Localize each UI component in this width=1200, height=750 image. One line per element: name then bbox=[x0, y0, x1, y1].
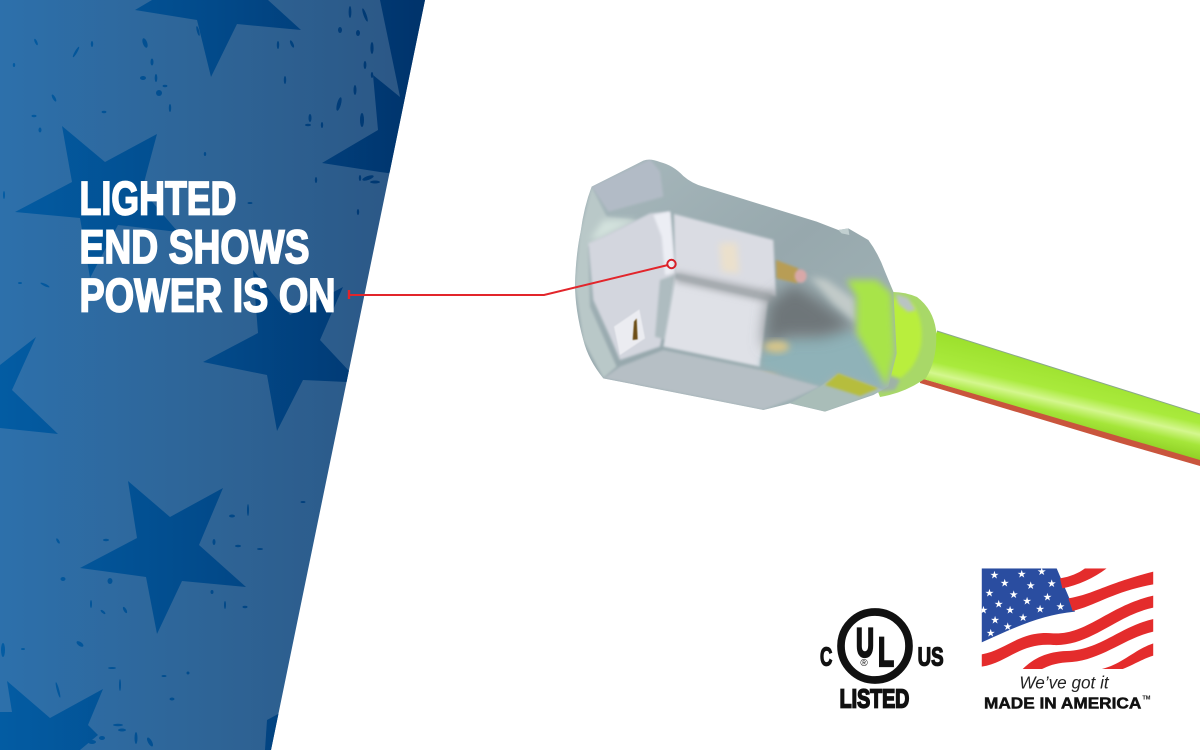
badge: UL listed: LISTED bbox=[840, 686, 909, 714]
canton stars: ★ bbox=[990, 615, 1000, 626]
canton stars: ★ bbox=[1043, 593, 1052, 604]
teal reflection bbox=[760, 330, 883, 388]
outlet slot bbox=[614, 309, 645, 355]
canton stars: ★ bbox=[986, 629, 995, 640]
tagline: We’ve got it bbox=[1019, 672, 1110, 692]
heading: END SHOWS bbox=[80, 220, 310, 273]
badge: made in America flag bbox=[979, 567, 1153, 712]
canton stars: ★ bbox=[1056, 602, 1065, 613]
lower face bbox=[603, 350, 820, 410]
LED bbox=[719, 243, 739, 273]
canton stars: ★ bbox=[1022, 596, 1032, 607]
canton stars: ★ bbox=[1037, 567, 1046, 578]
canton stars: ★ bbox=[1017, 570, 1026, 581]
plug left rim bbox=[575, 187, 637, 378]
cord red conductor edge bbox=[920, 378, 1200, 466]
canton stars bbox=[979, 567, 1065, 640]
cord green jacket bbox=[920, 331, 1200, 460]
copper wires bbox=[776, 260, 798, 283]
badge: UL listed: C bbox=[820, 641, 832, 671]
socket face bbox=[588, 212, 676, 360]
dark shadow bbox=[763, 283, 855, 347]
badge: UL listed: L bbox=[878, 629, 894, 675]
panel: blue star background bbox=[0, 0, 440, 750]
canton stars: ★ bbox=[990, 570, 999, 581]
badge: UL listed: ® bbox=[860, 658, 868, 669]
green glow bbox=[847, 280, 895, 387]
lit inner panel bbox=[674, 214, 776, 297]
collar notch bbox=[838, 228, 849, 235]
badge: UL listed bbox=[820, 612, 944, 714]
top tab bbox=[592, 159, 663, 212]
stars pattern bbox=[0, 0, 440, 750]
canton stars: ★ bbox=[1009, 590, 1018, 601]
heading: LIGHTED bbox=[80, 172, 236, 224]
canton stars: ★ bbox=[979, 605, 988, 616]
badge: UL listed: U bbox=[856, 620, 874, 666]
canton stars: ★ bbox=[985, 588, 994, 599]
power cord bbox=[920, 331, 1200, 466]
canton stars: ★ bbox=[1003, 622, 1012, 633]
canton stars: ★ bbox=[1000, 579, 1009, 590]
canton stars: ★ bbox=[994, 600, 1003, 611]
illustration: translucent lighted plug end bbox=[575, 159, 897, 412]
canton stars: ★ bbox=[1005, 605, 1015, 616]
waving flag bbox=[979, 567, 1153, 670]
grunge specks bbox=[1, 6, 380, 747]
canton stars: ★ bbox=[1047, 579, 1056, 590]
badge: UL listed: US bbox=[918, 641, 944, 671]
collar of the plug bbox=[866, 292, 936, 397]
made in America text: MADE IN AMERICA bbox=[984, 695, 1142, 712]
trademark: TM bbox=[1142, 696, 1151, 702]
canton stars: ★ bbox=[1035, 605, 1045, 616]
heading: POWER IS ON bbox=[80, 268, 336, 322]
heading bbox=[80, 172, 336, 322]
canton stars: ★ bbox=[1026, 581, 1035, 592]
callout leader line bbox=[349, 260, 676, 299]
canton stars: ★ bbox=[1018, 613, 1028, 624]
